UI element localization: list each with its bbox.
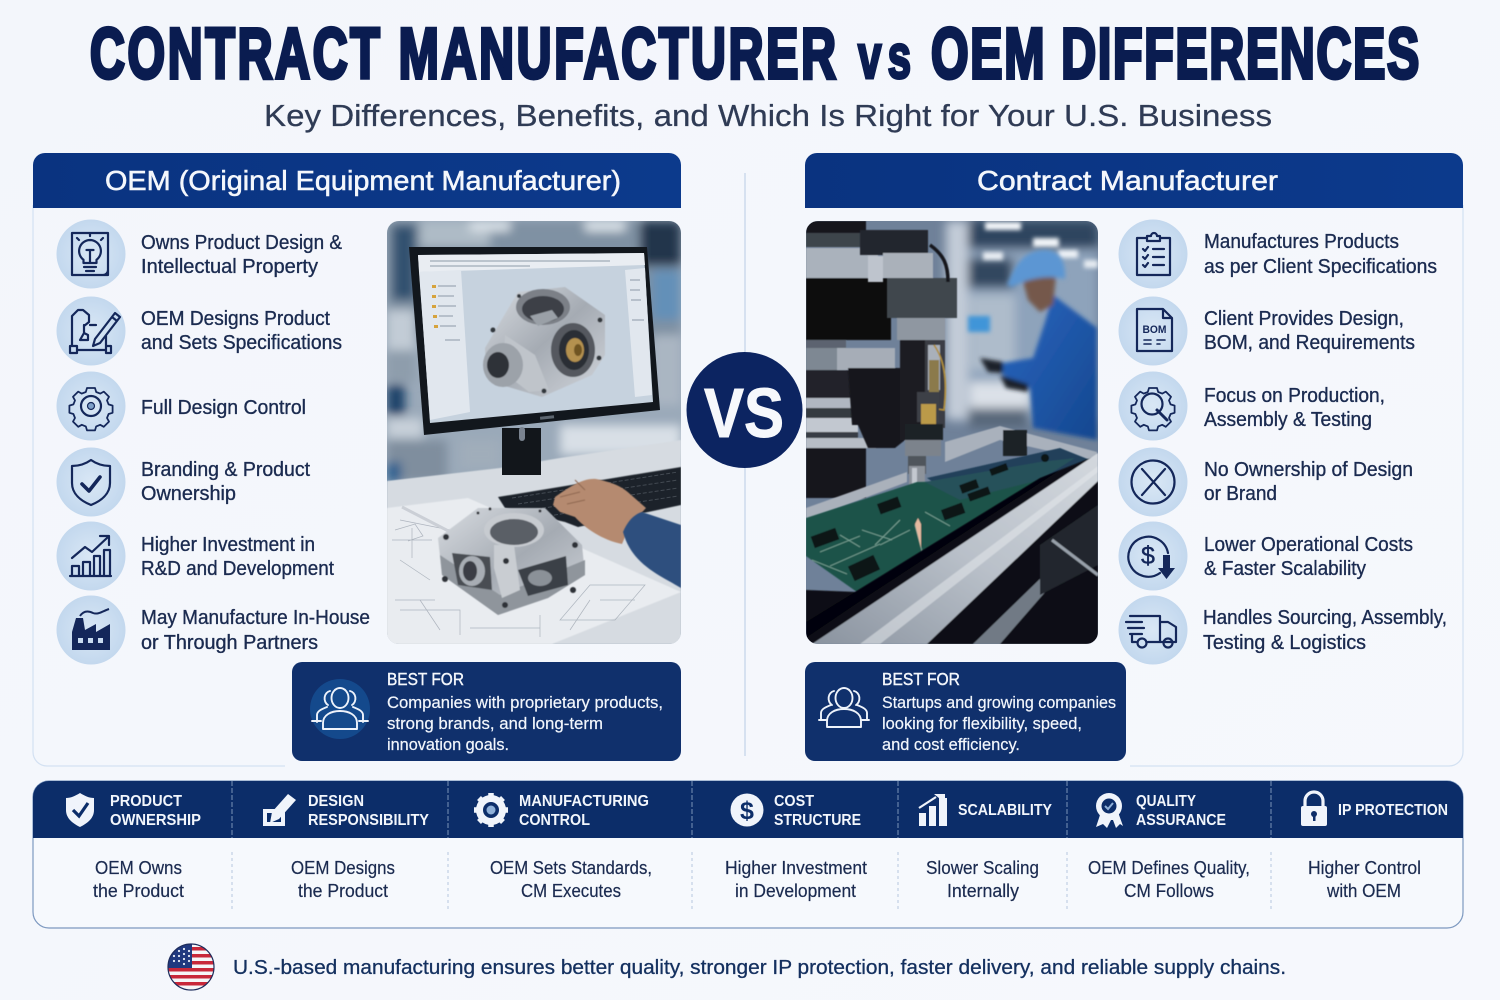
CM item 6: delivery truck: Handles Sourcing, Assembly, xyxy=(1203,607,1447,629)
column: IP protection: with OEM xyxy=(1326,881,1401,901)
CM panel header xyxy=(805,153,1463,208)
machine left frame xyxy=(806,221,891,498)
OEM item 4: shield: Branding & Product xyxy=(141,459,310,481)
sleeve xyxy=(623,512,681,588)
OEM panel header xyxy=(33,153,681,208)
column: quality assurance xyxy=(1088,793,1250,901)
OEM item 6: factory xyxy=(56,596,370,664)
VS badge: VS xyxy=(704,374,784,452)
CM item 2: BOM document: BOM xyxy=(1142,324,1166,336)
CM item 1: checklist xyxy=(1118,220,1437,288)
column: cost structure: STRUCTURE xyxy=(774,812,861,829)
title xyxy=(90,14,1419,93)
best for box: CM: looking for flexibility, speed, xyxy=(882,714,1082,733)
VS badge xyxy=(686,352,802,468)
CM item 6: delivery truck: Testing & Logistics xyxy=(1203,632,1366,654)
icon: people xyxy=(819,688,869,727)
column: manufacturing control: MANUFACTURING xyxy=(519,793,649,810)
column: design responsibility: OEM Designs xyxy=(291,858,395,878)
column: scalability: Slower Scaling xyxy=(926,858,1039,878)
panel: Contract Manufacturer xyxy=(805,153,1463,766)
column: scalability: SCALABILITY xyxy=(958,802,1052,819)
monitor stand xyxy=(502,428,541,475)
column: product ownership xyxy=(66,793,201,901)
best for box: OEM: innovation goals. xyxy=(387,735,509,754)
machine head xyxy=(837,230,957,516)
column: IP protection xyxy=(1301,792,1448,901)
CM item 4: no symbol xyxy=(1118,448,1413,516)
OEM item 6: factory: or Through Partners xyxy=(141,632,318,654)
desk surface xyxy=(387,440,681,644)
table header band xyxy=(33,781,1463,838)
column: design responsibility: RESPONSIBILITY xyxy=(308,812,429,829)
conveyor rail xyxy=(806,453,1098,644)
CM item 5: dollar down: Lower Operational Costs xyxy=(1204,534,1413,556)
column: IP protection: Higher Control xyxy=(1308,858,1421,878)
OEM item 4: shield: Ownership xyxy=(141,483,236,505)
CM item 1: checklist: as per Client Specifications xyxy=(1204,256,1437,278)
CM item 6: delivery truck xyxy=(1118,596,1447,664)
machined part on desk xyxy=(438,508,585,615)
column: cost structure: COST xyxy=(774,793,814,810)
CM item 5: dollar down: & Faster Scalability xyxy=(1204,558,1366,580)
CM panel header: Contract Manufacturer xyxy=(977,165,1278,196)
center divider xyxy=(744,173,746,756)
comparison table xyxy=(33,781,1463,928)
CM photo: PCB assembly machine xyxy=(806,221,1098,644)
CM item 3: gear and magnifier: Focus on Production, xyxy=(1204,385,1385,407)
column: manufacturing control xyxy=(474,793,652,901)
CM item 2: BOM document: Client Provides Design, xyxy=(1204,308,1404,330)
subtitle: Key Differences, Benefits, and Which Is Right for Your U.S. Business xyxy=(264,98,1272,133)
OEM item 3: gear: Full Design Control xyxy=(141,397,306,419)
best for box: CM: and cost efficiency. xyxy=(882,735,1020,754)
OEM item 2: specifications: OEM Designs Product xyxy=(141,308,330,330)
column: scalability: Internally xyxy=(947,881,1019,901)
OEM item 5: growth chart: R&D and Development xyxy=(141,558,334,580)
title: OEM DIFFERENCES xyxy=(931,14,1419,93)
column: quality assurance: CM Follows xyxy=(1124,881,1214,901)
column: design responsibility: the Product xyxy=(298,881,388,901)
column: scalability xyxy=(919,794,1052,901)
column: quality assurance: ASSURANCE xyxy=(1136,812,1226,829)
OEM item 1: design and IP xyxy=(56,220,343,288)
column: cost structure xyxy=(725,793,867,901)
column: design responsibility: DESIGN xyxy=(308,793,364,810)
column: manufacturing control: CONTROL xyxy=(519,812,590,829)
OEM item 5: growth chart: Higher Investment in xyxy=(141,534,315,556)
footer note with US flag xyxy=(168,944,1286,990)
icon: US flag xyxy=(168,944,214,990)
CM item 5: dollar down xyxy=(1118,522,1413,590)
best for box: CM xyxy=(805,662,1126,761)
hand xyxy=(553,479,646,544)
column: product ownership: the Product xyxy=(93,881,184,901)
blurred factory background xyxy=(946,221,1098,428)
PCB xyxy=(806,448,1090,592)
worker xyxy=(980,250,1097,440)
column: quality assurance: QUALITY xyxy=(1136,793,1196,810)
CM item 5: dollar down: $ xyxy=(1141,542,1155,570)
column: design responsibility xyxy=(263,793,429,901)
OEM item 5: growth chart xyxy=(56,522,334,590)
title: vs xyxy=(858,23,911,92)
best for box: CM: BEST FOR xyxy=(882,669,960,689)
column: quality assurance: OEM Defines Quality, xyxy=(1088,858,1250,878)
OEM item 6: factory: May Manufacture In-House xyxy=(141,607,370,629)
column: product ownership: PRODUCT xyxy=(110,793,182,810)
OEM item 4: shield xyxy=(56,448,310,516)
CM item 4: no symbol: No Ownership of Design xyxy=(1204,459,1413,481)
best for box: CM: Startups and growing companies xyxy=(882,693,1116,712)
panel: OEM xyxy=(33,153,681,766)
icon: people xyxy=(310,679,370,739)
OEM photo: CAD monitor and machined part xyxy=(387,221,681,644)
column: cost structure: $ xyxy=(740,797,754,825)
OEM item 3: gear xyxy=(56,372,306,440)
CM item 3: gear and magnifier: Assembly & Testing xyxy=(1204,409,1372,431)
monitor xyxy=(409,247,660,435)
column: manufacturing control: OEM Sets Standards, xyxy=(490,858,652,878)
column: product ownership: OEM Owns xyxy=(95,858,182,878)
OEM panel header: OEM (Original Equipment Manufacturer) xyxy=(105,165,621,196)
column: IP protection: IP PROTECTION xyxy=(1338,802,1448,819)
column: manufacturing control: CM Executes xyxy=(521,881,621,901)
OEM item 2: specifications: and Sets Specifications xyxy=(141,332,342,354)
best for box: OEM: strong brands, and long-term xyxy=(387,714,603,733)
footer note with US flag: U.S.-based manufacturing ensures better quality, stronger IP protection, faster delivery, and reliable supply chains. xyxy=(233,956,1286,979)
best for box: OEM xyxy=(292,662,681,761)
CM item 3: gear and magnifier xyxy=(1118,372,1385,440)
rear rails xyxy=(806,426,1097,520)
OEM item 1: design and IP: Owns Product Design & xyxy=(141,232,343,254)
keyboard xyxy=(498,467,681,527)
best for box: OEM: BEST FOR xyxy=(387,669,464,689)
OEM item 1: design and IP: Intellectual Property xyxy=(141,256,318,278)
OEM item 2: specifications xyxy=(56,296,342,366)
best for box: OEM: Companies with proprietary products, xyxy=(387,693,663,712)
blueprint paper xyxy=(387,498,681,644)
CM item 2: BOM document: BOM, and Requirements xyxy=(1204,332,1415,354)
CM item 2: BOM document xyxy=(1118,296,1415,366)
CM item 4: no symbol: or Brand xyxy=(1204,483,1277,505)
column: product ownership: OWNERSHIP xyxy=(110,812,201,829)
CAD model part xyxy=(483,287,605,397)
CM item 1: checklist: Manufactures Products xyxy=(1204,231,1399,253)
title: CONTRACT MANUFACTURER xyxy=(90,14,836,93)
column: cost structure: in Development xyxy=(735,881,856,901)
column: cost structure: Higher Investment xyxy=(725,858,867,878)
